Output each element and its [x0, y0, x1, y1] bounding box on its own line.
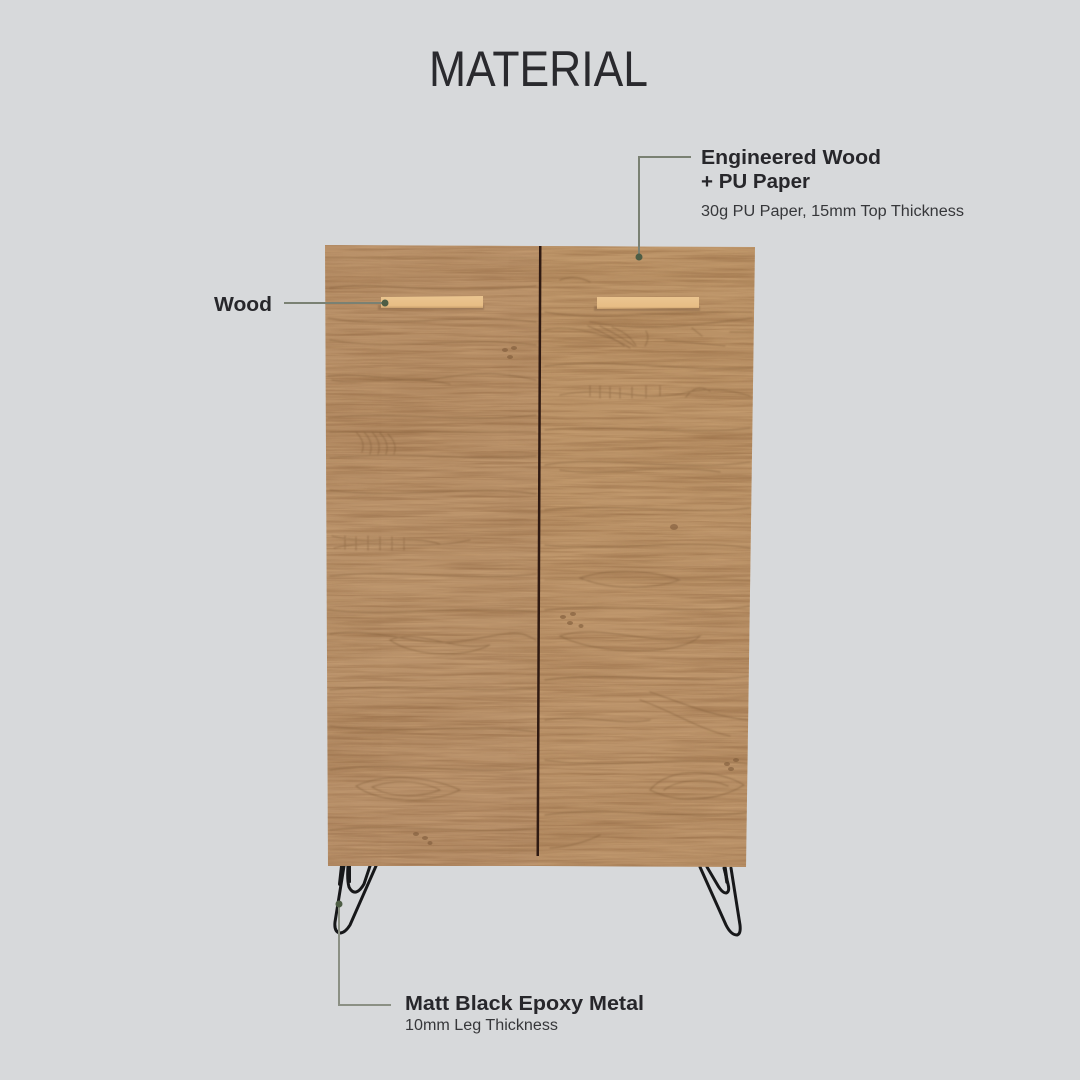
leader line: top panel	[636, 157, 691, 260]
right hairpin leg	[700, 867, 740, 935]
text: pu paper spec: 30g PU Paper, 15mm Top Thickness	[701, 203, 964, 220]
wood knots left	[413, 346, 517, 845]
callout: matt black epoxy metal	[336, 900, 644, 1034]
left door	[325, 245, 540, 867]
cabinet	[325, 245, 756, 868]
right door	[538, 246, 756, 868]
heading: pu paper: + PU Paper	[701, 170, 810, 193]
title: MATERIAL	[429, 41, 648, 97]
heading: wood: Wood	[214, 293, 272, 316]
heading: matt black epoxy metal: Matt Black Epoxy Metal	[405, 992, 644, 1015]
left hairpin leg	[335, 866, 376, 933]
leader line: handle	[284, 300, 388, 306]
callout: engineered wood	[636, 146, 964, 260]
right handle	[594, 297, 700, 311]
cabinet legs	[335, 866, 740, 935]
callout: wood	[214, 293, 388, 316]
text: leg spec: 10mm Leg Thickness	[405, 1017, 558, 1034]
left handle	[378, 296, 484, 310]
heading: engineered wood: Engineered Wood	[701, 146, 881, 169]
leader line: leg	[336, 900, 391, 1005]
wood knots right	[560, 524, 739, 771]
cabinet gap	[536, 246, 542, 856]
